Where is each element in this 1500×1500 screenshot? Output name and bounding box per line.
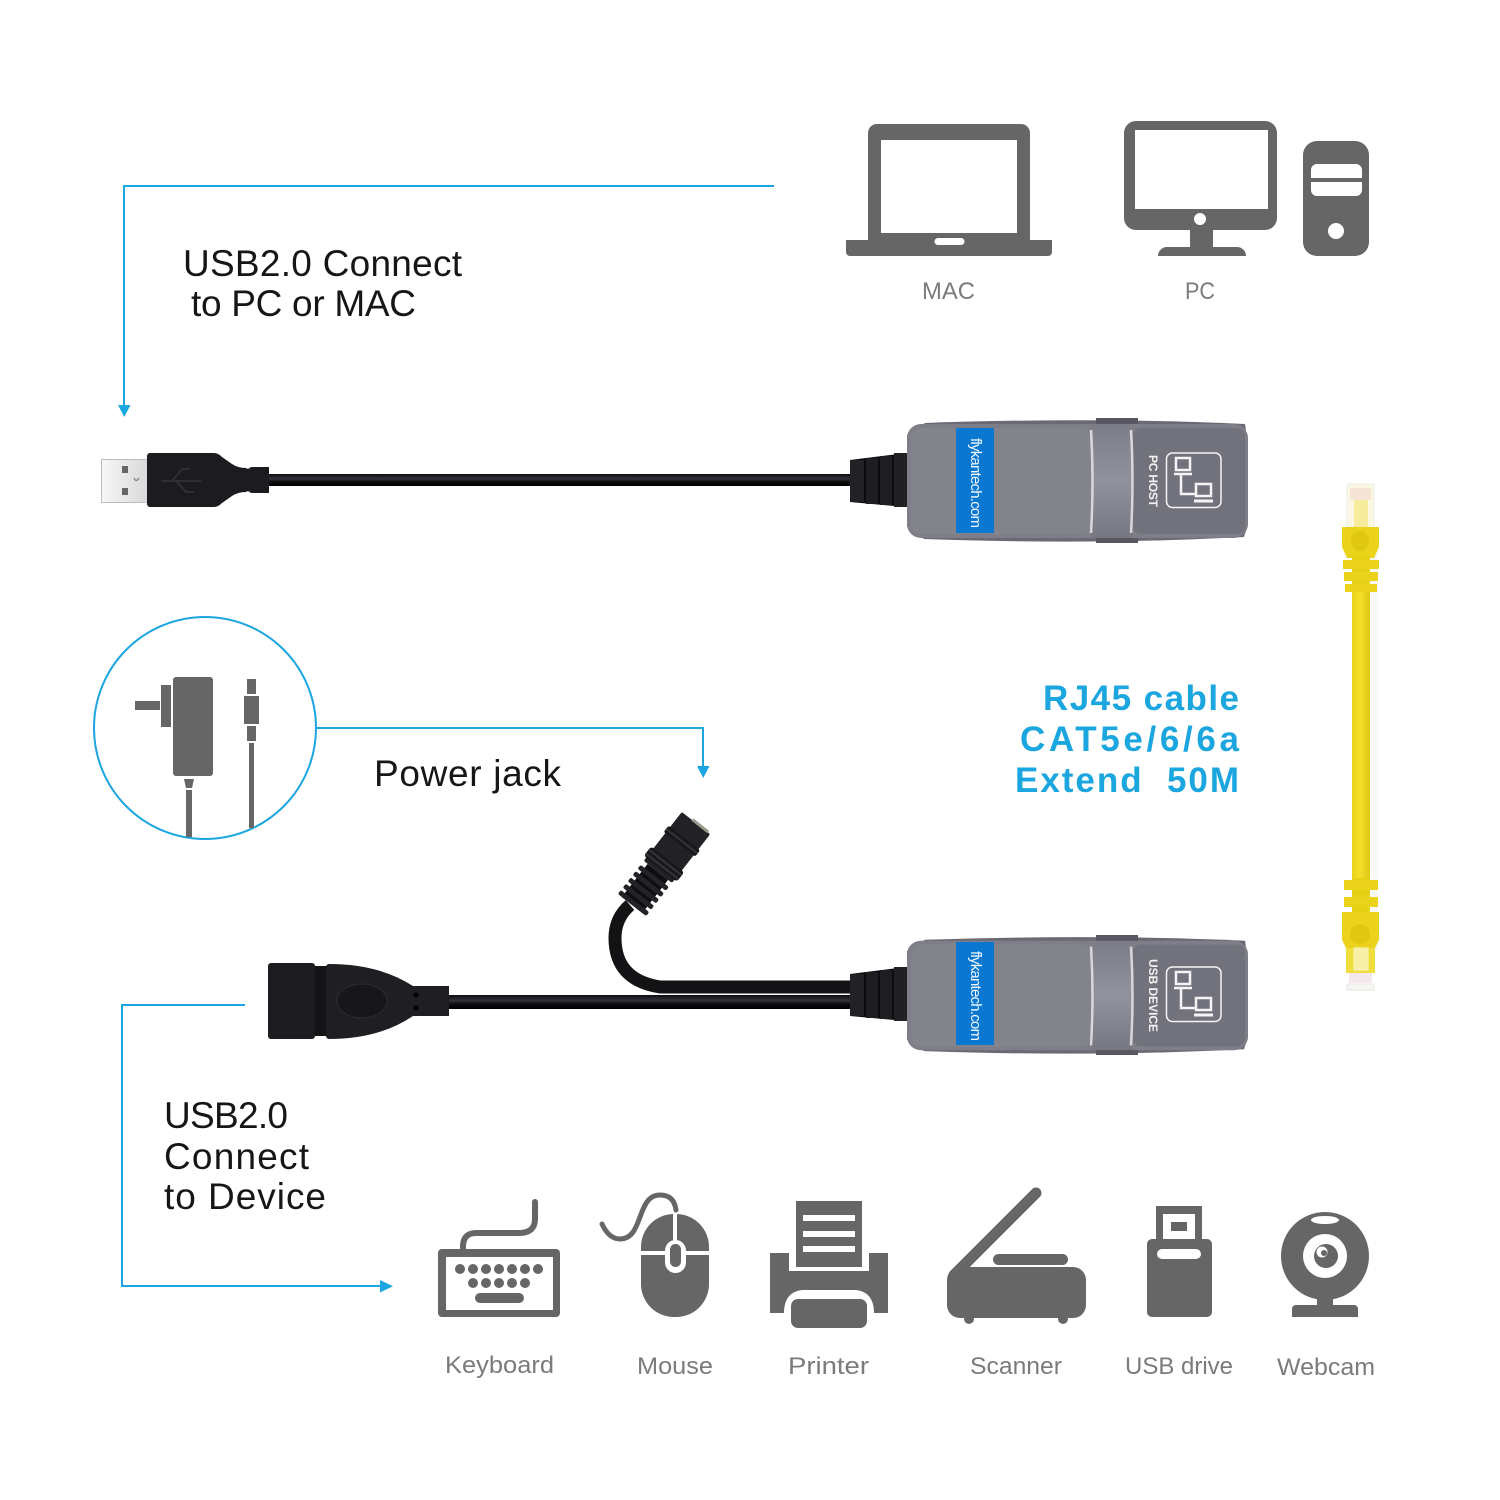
top connector	[1342, 484, 1379, 592]
icon: webcam	[1281, 1212, 1369, 1317]
strain relief: host	[850, 453, 907, 507]
heading: USB to PC or MAC: to PC or MAC	[191, 283, 416, 324]
label: Printer: Printer	[788, 1353, 869, 1380]
RJ45 heading: RJ45 cable	[1043, 679, 1239, 718]
icon: printer	[770, 1201, 888, 1328]
RJ45 heading	[1015, 679, 1240, 800]
device body	[907, 935, 1248, 1055]
RJ45 heading: CAT5e/6/6a	[1020, 720, 1240, 759]
icon: USB drive	[1147, 1206, 1212, 1317]
label: USB drive: USB drive	[1125, 1353, 1233, 1380]
heading: USB to PC or MAC: USB2.0 Connect	[183, 243, 463, 284]
USB female collar	[315, 966, 327, 1036]
label: MAC: MAC	[922, 278, 975, 305]
heading: USB to device: USB2.0	[164, 1095, 288, 1136]
blue brand label	[956, 428, 994, 533]
USB female overmold	[326, 964, 449, 1039]
blue brand label: flykantech.com	[967, 438, 984, 528]
arrow: power jack	[316, 728, 710, 778]
DC jack connector	[615, 809, 714, 918]
arrow: USB to device	[122, 1005, 393, 1292]
icon: mouse	[602, 1195, 709, 1317]
heading: USB to device: to Device	[164, 1176, 326, 1217]
power jack branch cable	[615, 809, 852, 987]
icon: wall adapter	[135, 677, 213, 837]
yellow RJ45 cable	[1342, 484, 1379, 990]
USB logo embossed	[161, 469, 201, 492]
device: PC HOST extender	[907, 418, 1248, 543]
device: USB DEVICE extender	[907, 935, 1248, 1055]
arrow: USB to PC or MAC	[118, 186, 774, 417]
label: Webcam: Webcam	[1277, 1354, 1375, 1381]
network icon	[1166, 967, 1221, 1022]
power adapter circle	[94, 617, 316, 839]
bottom connector	[1342, 878, 1379, 990]
neck dots	[414, 992, 418, 1010]
heading: USB to device	[164, 1095, 326, 1217]
device label: PC HOST: PC HOST	[1146, 455, 1160, 508]
heading: USB to PC or MAC	[183, 243, 463, 324]
icon: DC plug	[244, 679, 259, 828]
USB female socket	[268, 963, 315, 1039]
icon: scanner	[947, 1193, 1086, 1324]
branch strand	[615, 905, 852, 987]
heading: Power jack: Power jack	[374, 753, 562, 794]
icon: desktop monitor	[1124, 121, 1277, 256]
blue brand label: flykantech.com	[967, 951, 984, 1041]
cable strand	[1352, 590, 1370, 885]
RJ45 heading: Extend 50M	[1015, 761, 1239, 800]
USB logo oval	[337, 984, 387, 1018]
USB A female cable	[268, 963, 852, 1039]
icon: keyboard	[438, 1202, 560, 1317]
device label: USB DEVICE: USB DEVICE	[1146, 959, 1160, 1032]
cable shadow	[1371, 530, 1378, 950]
cable strand	[447, 995, 852, 1009]
icon: computer tower	[1303, 141, 1369, 256]
label: Scanner: Scanner	[970, 1353, 1062, 1380]
label: Mouse: Mouse	[637, 1353, 713, 1380]
heading: USB to device: Connect	[164, 1136, 310, 1177]
label: Keyboard: Keyboard	[445, 1352, 554, 1379]
network icon	[1166, 453, 1221, 508]
icon: laptop	[846, 124, 1052, 256]
cable strand	[262, 474, 852, 486]
label: PC: PC	[1185, 278, 1215, 305]
USB A overmold	[147, 453, 269, 507]
strain relief: device	[850, 967, 907, 1021]
USB A metal plug	[102, 460, 148, 502]
device body	[907, 418, 1248, 543]
blue brand label	[956, 942, 994, 1045]
USB A cable	[102, 453, 852, 507]
